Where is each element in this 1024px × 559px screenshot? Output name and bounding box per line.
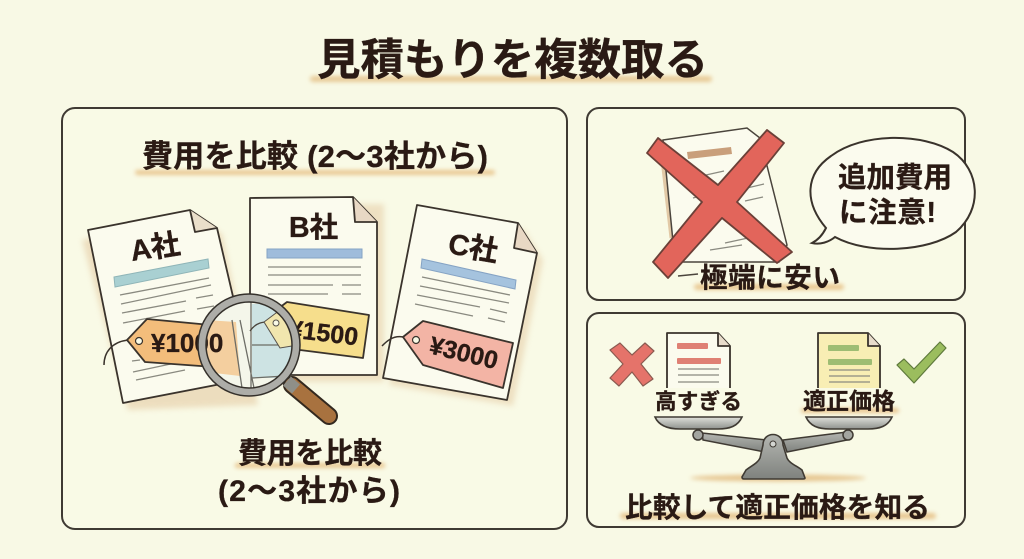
label: too expensive: 高すぎる [655,389,742,414]
price tag: 1500 yen: ¥1500 [287,315,360,351]
document with cross [647,128,792,278]
speech bubble: watch for extra costs: に注意! [839,197,936,229]
speech bubble: watch for extra costs [810,138,975,249]
title: 見積もりを複数取る [317,37,708,85]
price tag: 1000 yen: ¥1000 [151,328,223,358]
caption: compare to know fair price: 比較して適正価格を知る [625,492,930,523]
document: company A [82,210,258,410]
label: extremely cheap: 極端に安い [700,262,840,293]
icon: red x [610,343,654,386]
document: too expensive [667,333,730,388]
document: company A: A社 [128,228,182,268]
speech bubble: watch for extra costs: 追加費用 [838,162,952,194]
label: fair price: 適正価格 [803,388,895,414]
heading: compare costs: 費用を比較 (2〜3社から) [142,139,488,174]
price tag: 3000 yen: ¥3000 [427,332,501,375]
icon: green check [897,342,946,383]
document: company B: B社 [289,212,338,244]
caption: compare costs [218,437,400,508]
price tag: 1000 yen [104,319,232,368]
icon: red cross [647,130,792,278]
price tag: 3000 yen [382,321,513,388]
balance scale [655,388,899,482]
panel: too cheap warning [587,108,975,300]
icon: magnifying glass: ¥1000 [151,328,223,358]
document: company C: C社 [446,227,501,269]
document: company C [383,205,543,406]
caption: compare costs: (2〜3社から) [218,475,400,508]
price tag: 1500 yen [263,302,369,358]
icon: magnifying glass [197,293,338,425]
panel: compare and find fair price [587,313,965,527]
document: fair price [818,333,880,388]
document: company B [250,197,384,382]
panel: cost comparison [62,108,567,529]
caption: compare costs: 費用を比較 [238,437,382,470]
